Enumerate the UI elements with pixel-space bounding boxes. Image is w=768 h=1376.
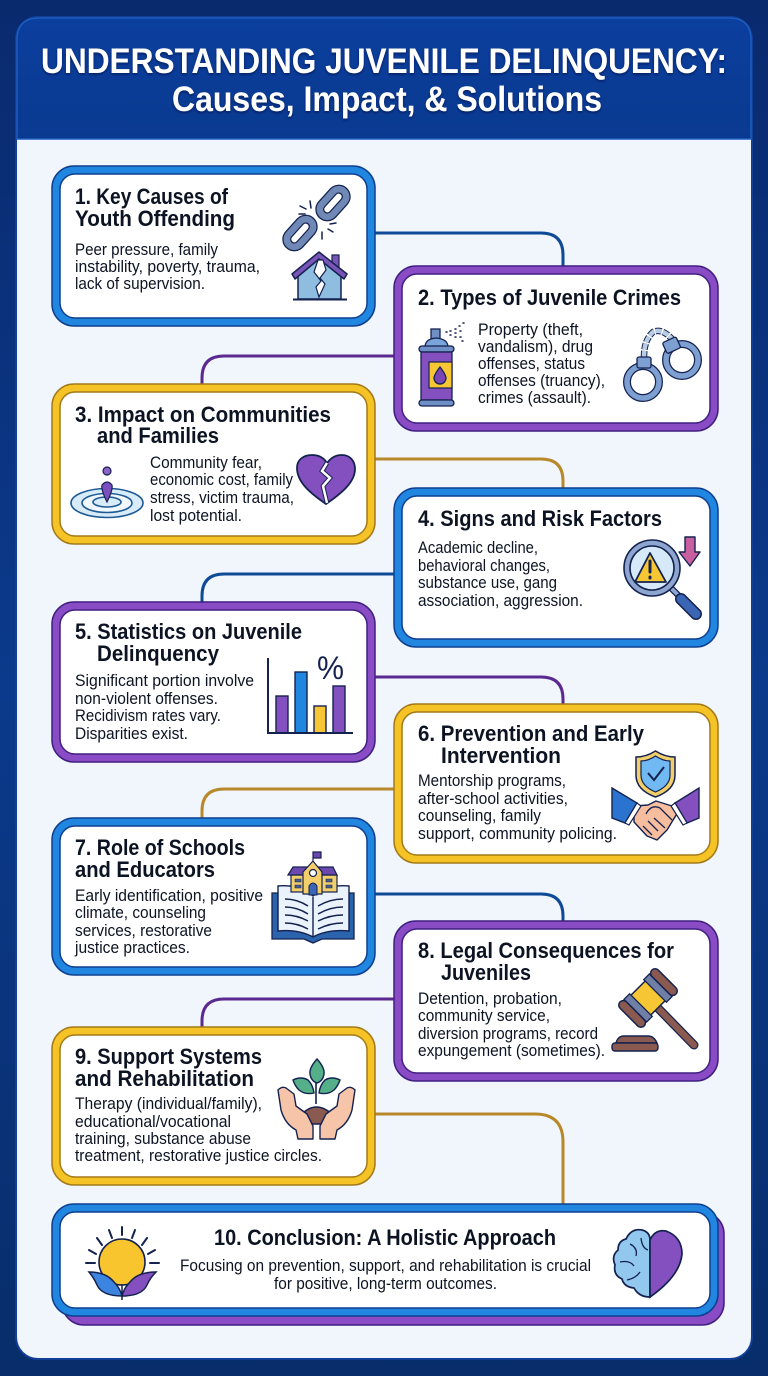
body 4: substance use, gang — [418, 574, 557, 592]
heading 7: 7. Role of Schools — [75, 835, 245, 860]
icon: gavel — [612, 967, 694, 1051]
body 4 — [418, 539, 583, 610]
heading 1: Youth Offending — [75, 206, 235, 231]
body 3: lost potential. — [150, 507, 242, 525]
body 10 — [180, 1257, 591, 1293]
body 9: treatment, restorative justice circles. — [75, 1147, 322, 1165]
heading 4: 4. Signs and Risk Factors — [418, 506, 662, 531]
icon: brain and heart — [614, 1230, 682, 1297]
connector 7 to 8 — [375, 894, 563, 921]
heading 9 — [75, 1044, 262, 1091]
body 7: climate, counseling — [75, 904, 206, 922]
body 7: Early identification, positive — [75, 887, 263, 905]
heading 3 — [75, 402, 331, 448]
icon: cracked house — [292, 252, 347, 300]
panel 2: types of crimes — [394, 266, 718, 431]
heading 3: 3. Impact on Communities — [75, 402, 331, 427]
body 3: stress, victim trauma, — [150, 489, 294, 507]
connector 9 to 10 — [375, 1114, 563, 1204]
body 2: crimes (assault). — [478, 389, 591, 407]
connector 1 to 2 — [375, 233, 563, 266]
heading 8: Juveniles — [441, 960, 531, 985]
heading 6: Intervention — [441, 743, 561, 768]
body 10: Focusing on prevention, support, and rehabilitation is crucial — [180, 1257, 591, 1275]
heading 1: 1. Key Causes of — [75, 184, 229, 209]
connector 8 to 9 — [202, 999, 394, 1027]
icon: broken chain — [284, 186, 349, 250]
icon: broken heart — [297, 455, 355, 504]
icon: handcuffs — [627, 331, 698, 398]
body 6 — [418, 772, 617, 843]
body 8: community service, — [418, 1007, 550, 1025]
body 4: behavioral changes, — [418, 557, 550, 575]
body 2: offenses, status — [478, 355, 585, 373]
connector 6 to 7 — [202, 789, 394, 818]
body 3: economic cost, family — [150, 471, 294, 489]
heading 7: and Educators — [75, 857, 215, 882]
heading 1 — [75, 184, 235, 231]
body 8 — [418, 990, 605, 1060]
heading 5: Delinquency — [97, 641, 220, 666]
connector 3 to 4 — [375, 459, 563, 488]
connector 5 to 6 — [375, 677, 563, 704]
icon: plant in hands — [278, 1059, 355, 1139]
body 2 — [478, 321, 605, 407]
icon: school on open book — [272, 852, 354, 943]
heading 8: 8. Legal Consequences for — [418, 938, 674, 963]
body 1 — [75, 241, 260, 293]
panel 4: signs and risk factors — [394, 488, 718, 647]
body 6: Mentorship programs, — [418, 772, 566, 790]
heading 3: and Families — [97, 423, 219, 448]
title: Causes, Impact, & Solutions — [172, 80, 602, 119]
heading 8 — [418, 938, 674, 985]
icon: sun and leaves — [86, 1227, 159, 1300]
heading 9: 9. Support Systems — [75, 1044, 262, 1069]
heading 9: and Rehabilitation — [75, 1066, 254, 1091]
body 2: Property (theft, — [478, 321, 583, 339]
body 8: diversion programs, record — [418, 1025, 598, 1043]
body 6: after-school activities, — [418, 790, 568, 808]
body 5 — [75, 672, 254, 743]
body 3 — [150, 454, 294, 525]
body 1: Peer pressure, family — [75, 241, 219, 259]
body 7 — [74, 887, 263, 957]
body 5: non-violent offenses. — [75, 690, 218, 708]
body 8: expungement (sometimes). — [418, 1042, 605, 1060]
body 8: Detention, probation, — [418, 990, 562, 1008]
body 5: Significant portion involve — [75, 672, 254, 690]
heading 5: 5. Statistics on Juvenile — [75, 619, 302, 644]
body 1: lack of supervision. — [75, 275, 205, 293]
connector 4 to 5 — [202, 574, 394, 602]
body 7: justice practices. — [74, 939, 190, 957]
body 5: Disparities exist. — [75, 725, 188, 743]
body 6: counseling, family — [418, 807, 542, 825]
panel 3: impact — [52, 384, 375, 544]
panel 8: legal consequences — [394, 921, 718, 1081]
body 5: Recidivism rates vary. — [75, 707, 221, 725]
icon: spray can — [419, 323, 464, 406]
panel 9: support systems — [52, 1027, 375, 1185]
body 9: educational/vocational — [75, 1113, 231, 1131]
heading 6: 6. Prevention and Early — [418, 721, 645, 746]
panel 10: conclusion — [52, 1204, 724, 1325]
body 4: association, aggression. — [418, 592, 583, 610]
icon: shield and handshake — [612, 751, 699, 840]
body 9: Therapy (individual/family), — [75, 1095, 262, 1113]
panel 1: key causes — [52, 166, 375, 326]
bar chart icon: % — [317, 650, 344, 686]
panel 5: statistics — [52, 602, 375, 762]
body 1: instability, poverty, trauma, — [75, 258, 260, 276]
body 4: Academic decline, — [418, 539, 538, 557]
heading 10: 10. Conclusion: A Holistic Approach — [214, 1225, 556, 1250]
body 9 — [75, 1095, 322, 1165]
body 10: for positive, long-term outcomes. — [274, 1275, 497, 1293]
icon: magnifier with warning — [624, 537, 700, 614]
body 2: offenses (truancy), — [478, 372, 605, 390]
panel 6: prevention — [394, 704, 718, 863]
body 6: support, community policing. — [418, 825, 617, 843]
connector 2 to 3 — [202, 356, 394, 384]
panel 7: schools — [52, 818, 375, 975]
heading 2: 2. Types of Juvenile Crimes — [418, 285, 681, 310]
header band — [17, 18, 751, 139]
title — [41, 42, 727, 119]
heading 5 — [75, 619, 302, 666]
body 7: services, restorative — [75, 922, 212, 940]
icon: water ripple — [71, 467, 143, 518]
heading 7 — [75, 835, 245, 882]
body 3: Community fear, — [150, 454, 262, 472]
bar chart icon — [268, 650, 353, 733]
body 2: vandalism), drug — [478, 338, 593, 356]
heading 6 — [418, 721, 645, 768]
body 9: training, substance abuse — [75, 1130, 251, 1148]
